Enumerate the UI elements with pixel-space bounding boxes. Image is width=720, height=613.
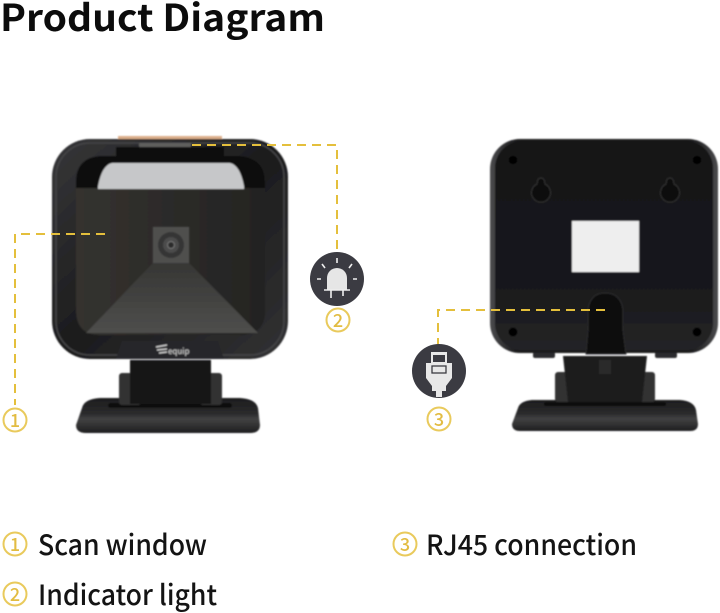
legend: indicator light: Indicator light [38,574,217,613]
leader line 3 [438,310,605,345]
legend: RJ45 connection: 3 [400,531,410,557]
keyhole mounts [532,178,680,202]
leader line 1 [15,234,105,405]
rubber feet [533,352,677,358]
indicator light strip [139,143,191,147]
screw holes [508,156,702,336]
marker 3 [428,406,450,432]
marker 1 [4,407,26,433]
LED light bar [98,163,244,189]
scan window [76,156,265,335]
icon: indicator light [310,252,364,306]
legend: indicator light: 2 [10,581,20,607]
marker 2 [326,307,350,333]
leader line 2 [192,145,337,252]
front stand [76,360,260,433]
marker 1: 1 [10,407,20,433]
front housing [52,139,288,359]
camera module [153,227,189,263]
orange top edge [118,136,222,139]
legend: RJ45 connection: RJ45 connection [426,524,637,564]
back view of scanner [490,139,718,431]
marker 3: 3 [434,406,444,432]
legend: scan window: Scan window [38,524,207,564]
back stand [512,356,698,431]
logo panel [116,341,224,359]
RJ45 port recess [586,293,626,354]
label area [572,221,639,272]
front view of scanner [52,136,288,433]
icon: RJ45 plug [412,344,466,398]
logo panel: equip [168,346,189,357]
legend: scan window: 1 [10,531,20,557]
back housing [490,139,718,353]
marker 2: 2 [333,307,343,333]
